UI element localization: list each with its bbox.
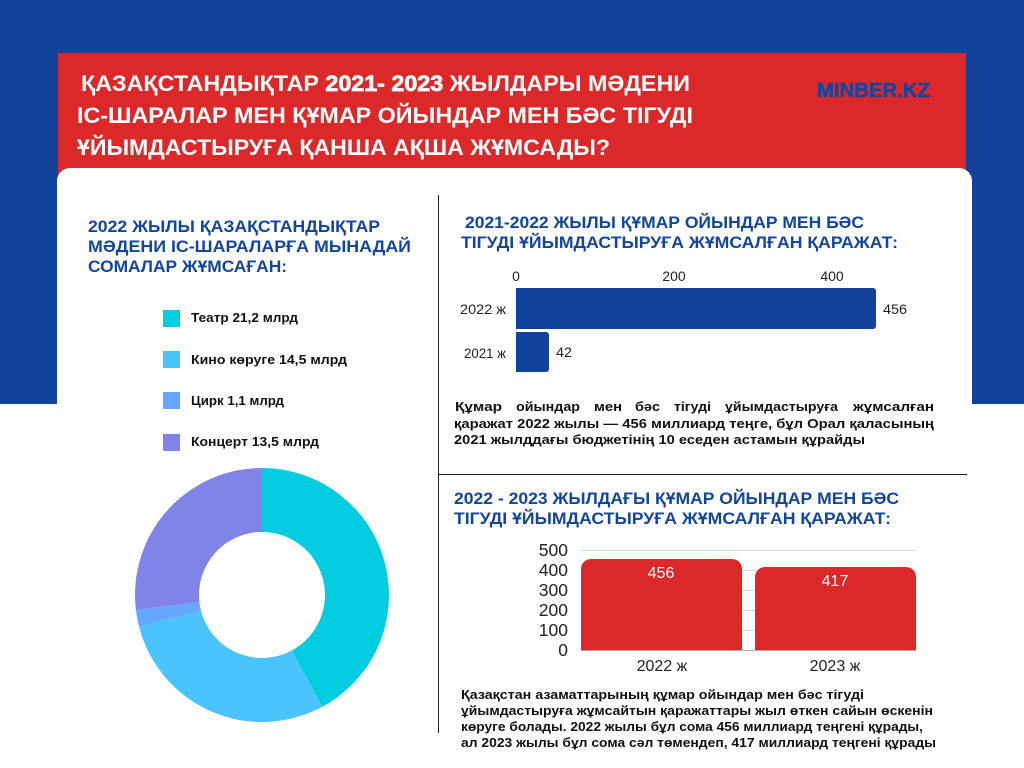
legend: Кино көруге 14,5 млрд xyxy=(191,352,348,367)
horizontal bar chart xyxy=(460,268,907,372)
heading: culture spending: МӘДЕНИ ІС-ШАРАЛАРҒА МЫНАДАЙ xyxy=(88,237,411,256)
horizontal bar chart: 0 xyxy=(512,268,520,284)
column chart: 2022 ж xyxy=(637,658,688,675)
donut chart xyxy=(135,468,389,722)
horizontal bar chart: 2022 ж xyxy=(460,301,507,317)
heading: 2022-2023: 2022 - 2023 ЖЫЛДАҒЫ ҚҰМАР ОЙЫНДАР МЕН БӘС xyxy=(454,489,899,508)
title: ҰЙЫМДАСТЫРУҒА ҚАНША АҚША ЖҰМСАДЫ? xyxy=(77,135,610,160)
column chart xyxy=(539,540,916,675)
text block: trend note xyxy=(461,687,936,750)
text block: 2022 spending note: бәс xyxy=(635,399,660,414)
text block: 2022 spending note: ойындар xyxy=(516,399,580,414)
text block: 2022 spending note: мен xyxy=(594,399,622,414)
heading: 2021-2022 xyxy=(461,213,898,252)
panel: culture spending xyxy=(88,217,411,722)
heading: 2021-2022: ТІГУДІ ҰЙЫМДАСТЫРУҒА ЖҰМСАЛҒАН ҚАРАЖАТ: xyxy=(461,233,898,252)
column chart: 456 xyxy=(648,565,674,582)
legend: Концерт 13,5 млрд xyxy=(191,434,320,449)
text block: 2022 spending note: Құмар xyxy=(455,399,502,414)
text block: 2022 spending note: ұйымдастыруға xyxy=(725,399,839,414)
column chart: 300 xyxy=(539,580,568,600)
legend: Цирк 1,1 млрд xyxy=(191,393,285,408)
heading: 2022-2023 xyxy=(454,489,899,528)
column chart: 500 xyxy=(539,540,568,560)
panel: 2022-2023 gambling spending xyxy=(454,489,936,750)
horizontal bar chart: 456 xyxy=(883,301,907,317)
legend: Театр 21,2 млрд xyxy=(191,310,299,325)
horizontal bar chart: 200 xyxy=(662,268,686,284)
title xyxy=(77,71,693,160)
text block: 2022 spending note: жұмсалған xyxy=(852,399,934,414)
text block: trend note: ұйымдастыруға жұмсайтын қаражаттары жыл өткен сайын өскенін xyxy=(461,703,933,718)
white content panel xyxy=(57,168,1024,768)
horizontal bar chart: 400 xyxy=(820,268,844,284)
brand label: MINBER.KZ xyxy=(817,79,930,102)
text block: 2022 spending note: қаражат 2022 жылы — 456 миллиард теңге, бұл Орал қаласының xyxy=(454,416,934,431)
text block: 2022 spending note: тігуді xyxy=(674,399,711,414)
column chart: 400 xyxy=(539,560,568,580)
column chart: 417 xyxy=(822,573,848,590)
text block: 2022 spending note xyxy=(454,399,934,447)
text block: 2022 spending note: 2021 жылддағы бюджетінің 10 еседен астамын құрайды xyxy=(454,432,865,447)
column chart: 200 xyxy=(539,600,568,620)
column chart: 2023 ж xyxy=(810,658,861,675)
heading: culture spending: СОМАЛАР ЖҰМСАҒАН: xyxy=(88,257,287,276)
column chart: 0 xyxy=(558,640,568,660)
title: ІС-ШАРАЛАР МЕН ҚҰМАР ОЙЫНДАР МЕН БӘС ТІГУДІ xyxy=(77,103,693,128)
text block: trend note: ал 2023 жылы бұл сома сәл төмендеп, 417 миллиард теңгені құрады xyxy=(461,735,936,750)
column chart: 100 xyxy=(539,620,568,640)
text block: trend note: Қазақстан азаматтарының құмар ойындар мен бәс тігуді xyxy=(461,687,864,702)
horizontal bar chart: 42 xyxy=(556,344,572,360)
red header banner xyxy=(58,53,966,178)
heading: culture spending xyxy=(88,217,411,276)
heading: 2022-2023: ТІГУДІ ҰЙЫМДАСТЫРУҒА ЖҰМСАЛҒАН ҚАРАЖАТ: xyxy=(454,509,891,528)
blue background band xyxy=(0,0,1024,404)
legend xyxy=(163,310,348,451)
text block: trend note: көруге болады. 2022 жылы бұл сома 456 миллиард теңгені құрады, xyxy=(461,719,923,734)
horizontal bar chart: 2021 ж xyxy=(464,345,507,361)
panel: 2021-2022 gambling spending xyxy=(454,213,934,447)
title: ҚАЗАҚСТАНДЫҚТАР 2021- 2023 ЖЫЛДАРЫ МӘДЕНИ xyxy=(81,71,690,96)
heading: culture spending: 2022 ЖЫЛЫ ҚАЗАҚСТАНДЫҚТАР xyxy=(88,217,380,236)
heading: 2021-2022: 2021-2022 ЖЫЛЫ ҚҰМАР ОЙЫНДАР МЕН БӘС xyxy=(465,213,864,232)
